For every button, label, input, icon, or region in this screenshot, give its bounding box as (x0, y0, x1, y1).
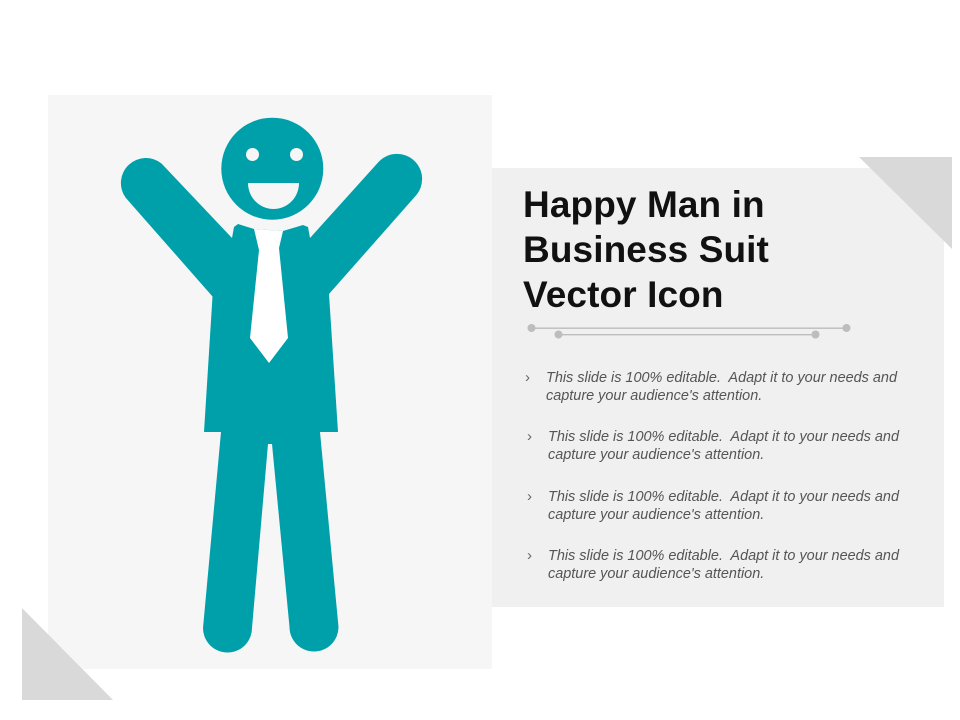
bullet 2: capture your audience's attention. (548, 447, 764, 463)
corner triangle: bottom left (22, 608, 113, 700)
suit body and arms (121, 154, 422, 652)
head (221, 118, 323, 220)
bullet 1: This slide is 100% editable. Adapt it to your needs and (546, 370, 897, 386)
bullet 2: This slide is 100% editable. Adapt it to your needs and (548, 429, 899, 445)
bullet 3: capture your audience's attention. (548, 507, 764, 523)
bullet 3: › (527, 488, 532, 505)
bullet 3 (527, 488, 900, 523)
bullet 2: › (527, 428, 532, 445)
title: Vector Icon (523, 274, 724, 314)
right eye (290, 148, 303, 161)
left eye (246, 148, 259, 161)
bullet 4: This slide is 100% editable. Adapt it to your needs and (548, 548, 899, 564)
title (523, 184, 769, 314)
panel: figure background (48, 95, 492, 669)
bullet 1: › (525, 369, 530, 386)
bullet 4: capture your audience's attention. (548, 566, 764, 582)
bullet 1: capture your audience's attention. (546, 388, 762, 404)
corner triangle: top right (859, 157, 952, 249)
panel: text background (492, 168, 944, 607)
title: Happy Man in (523, 184, 765, 224)
bullet 3: This slide is 100% editable. Adapt it to your needs and (548, 489, 899, 505)
bullet 4: › (527, 547, 532, 564)
tie (250, 229, 288, 363)
mouth (248, 183, 299, 209)
bullet 4 (527, 547, 900, 582)
bullet 2 (527, 428, 900, 463)
title: Business Suit (523, 228, 769, 270)
divider with dots (528, 324, 850, 338)
bullet 1 (525, 369, 898, 404)
